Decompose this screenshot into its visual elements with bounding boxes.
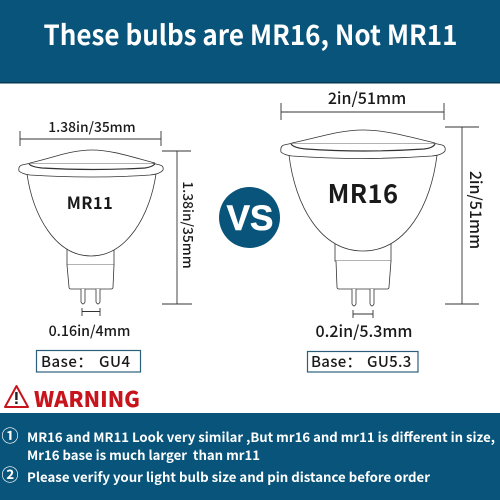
panel: notes	[0, 413, 500, 500]
note 1	[2, 422, 495, 464]
icon: VS badge	[219, 187, 280, 248]
panel: MR16 bulb with dimensions	[281, 85, 489, 372]
base label: Base：	[311, 351, 362, 372]
top width dimension	[281, 85, 444, 120]
label: MR16: MR16	[328, 174, 398, 211]
pin distance dimension: 0.2in/5.3mm	[315, 318, 413, 342]
base label	[308, 351, 418, 372]
title: These bulbs are MR16, Not MR11	[44, 13, 458, 53]
pin distance dimension	[49, 308, 130, 341]
icon: MR16 bulb outline	[281, 130, 445, 306]
icon: warning triangle	[5, 386, 28, 407]
top width dimension: 1.38in/35mm	[48, 116, 136, 136]
height dimension	[162, 151, 199, 304]
base label: GU4	[99, 351, 131, 372]
icon: VS badge: VS	[227, 199, 273, 238]
pin distance dimension: 0.16in/4mm	[49, 321, 130, 341]
base label: Base：	[41, 351, 93, 372]
note 2: ②	[2, 461, 18, 486]
note 1: MR16 and MR11 Look very similar ,But mr16 and mr11 is different in size,	[27, 427, 495, 446]
label: MR11: MR11	[67, 190, 113, 214]
top width dimension	[20, 116, 161, 146]
height dimension: 1.38in/35mm	[179, 181, 199, 269]
warning heading: WARNING	[34, 383, 140, 414]
height dimension	[445, 127, 489, 304]
icon: MR11 bulb outline	[19, 150, 163, 304]
header banner	[0, 0, 500, 84]
base label	[36, 350, 140, 372]
note 1: ①	[2, 422, 18, 447]
note 2: Please verify your light bulb size and pin distance before order	[27, 467, 430, 486]
note 1: Mr16 base is much larger than mr11	[27, 445, 260, 464]
height dimension: 2in/51mm	[465, 171, 489, 249]
top width dimension: 2in/51mm	[328, 85, 406, 109]
base label: GU5.3	[367, 351, 412, 372]
panel: MR11 bulb with dimensions	[19, 116, 199, 372]
